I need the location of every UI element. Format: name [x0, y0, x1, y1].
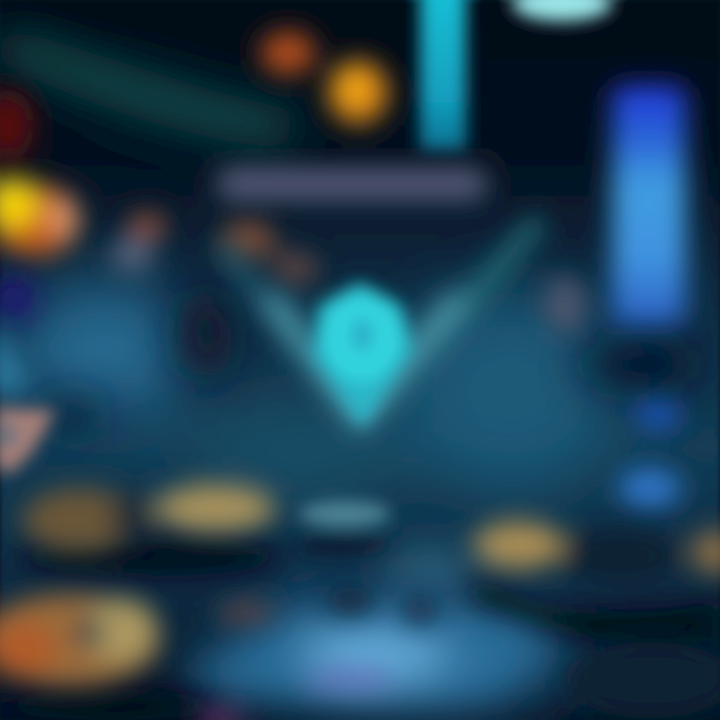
faint orange lights, mid-left: [110, 213, 319, 284]
teal diagonal strokes, around emblem: [225, 225, 535, 415]
pale cyan light, top edge: [512, 0, 612, 21]
golden dish, right: [472, 521, 720, 581]
blue table highlights: [190, 554, 550, 695]
central cyan diamond emblem: [312, 282, 414, 428]
dark patches, mid-level: [30, 287, 700, 431]
dark band behind dishes, left: [20, 536, 280, 576]
pink-beige object, left edge: [0, 408, 56, 474]
orange-gold dish, bottom left: [0, 594, 160, 686]
pale blue dish, center: [297, 501, 393, 556]
haze: blue glows: [15, 285, 620, 700]
yellow-orange lamp, left: [0, 177, 79, 256]
blue light tower, right: [612, 85, 686, 325]
dark red glow, top left: [0, 89, 34, 161]
dark band, right: [470, 575, 720, 644]
dark teal streak, top left: [0, 25, 300, 150]
purple glow, left: [0, 276, 36, 320]
grey horizontal bar, center: [218, 168, 486, 200]
dark table shapes: [0, 586, 720, 720]
cyan light column, top: [420, 0, 466, 150]
faint pink glow, right: [545, 277, 585, 333]
golden dish, left: [22, 484, 275, 552]
orange lights, top: [260, 31, 388, 124]
blue small lights, right: [618, 400, 682, 508]
left blue pane: [0, 315, 32, 395]
muted red and violet accents, bottom: [194, 602, 394, 720]
